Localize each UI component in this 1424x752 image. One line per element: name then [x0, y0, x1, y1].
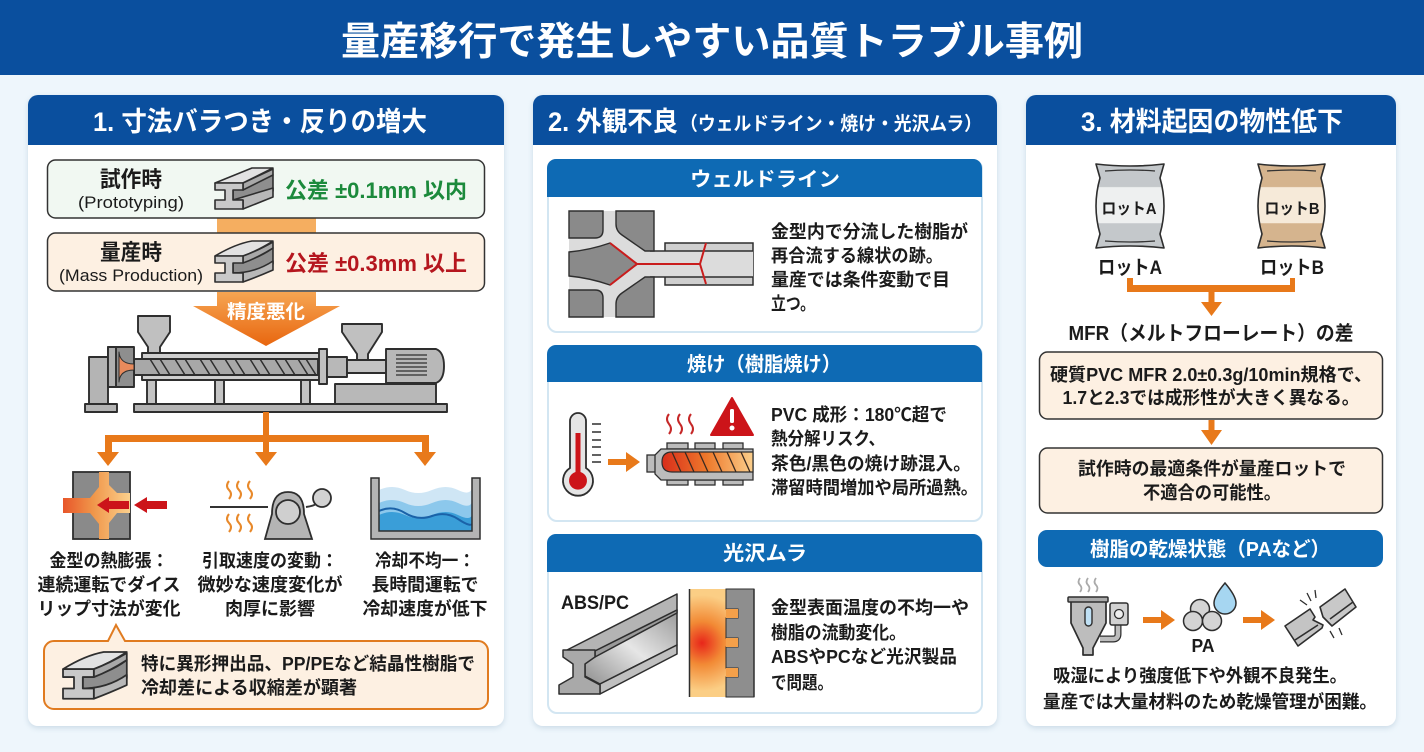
arrow: heat to barrel: [608, 452, 640, 472]
panel 2 heading: （ウェルドライン・焼け・光沢ムラ）: [680, 113, 982, 135]
card heading: [547, 159, 982, 197]
text: moisture absorption: [1043, 666, 1377, 712]
box: lot mismatch: 不適合の可能性。: [1143, 483, 1281, 503]
icon: bag lot A: [1096, 164, 1164, 248]
row: mass production: 公差 ±0.3mm 以上: [285, 251, 467, 276]
text: uneven cooling: 冷却不均一：: [375, 551, 475, 571]
heading: MFR difference: MFR（メルトフローレート）の差: [1068, 322, 1354, 345]
text: pulling speed variation: 肉厚に影響: [225, 598, 315, 619]
callout: crystalline resin shrinkage: 冷却差による収縮差が顕著: [141, 677, 357, 698]
text: pulling speed variation: [198, 551, 342, 619]
card: weld line: [547, 159, 982, 332]
icon: thermometer: [563, 413, 601, 496]
arrow: lots converge: [1127, 278, 1295, 316]
icon: extruder machine: [85, 316, 447, 412]
panel 1 heading: 1. 寸法バラつき・反りの増大: [93, 107, 427, 137]
icon: warning triangle: [711, 398, 753, 435]
text: burn marks: [771, 404, 978, 498]
text: gloss unevenness: ABSやPCなど光沢製品: [771, 647, 957, 667]
text: weld line: 量産では条件変動で目: [771, 270, 950, 290]
text: weld line: [771, 221, 968, 314]
row: mass production: (Mass Production): [59, 266, 203, 285]
arrows: branch to three causes: [97, 412, 436, 466]
icon: beam: [63, 652, 127, 699]
subheading: drying condition: [1038, 530, 1383, 567]
box: MFR specification: 硬質PVC MFR 2.0±0.3g/10min規格で、: [1050, 365, 1372, 385]
text: die thermal expansion: 金型の熱膨張：: [50, 551, 168, 571]
text: die thermal expansion: リップ寸法が変化: [38, 598, 180, 619]
text: die thermal expansion: [38, 551, 180, 619]
text: moisture absorption: 吸湿により強度低下や外観不良発生。: [1053, 666, 1347, 686]
panel 3: material-related property decline: [1026, 95, 1396, 726]
row: prototyping: [48, 160, 484, 218]
icon: bag lot A: ロットA: [1102, 201, 1157, 218]
subheading: drying condition: 樹脂の乾燥状態（PAなど）: [1090, 538, 1330, 561]
box: lot mismatch: 試作時の最適条件が量産ロットで: [1078, 458, 1346, 479]
text: weld line: 立つ。: [771, 294, 815, 314]
text: uneven cooling: 長時間運転で: [372, 575, 478, 595]
row: prototyping: (Prototyping): [78, 193, 184, 212]
title banner: 量産移行で発生しやすい品質トラブル事例: [341, 20, 1083, 64]
card: gloss unevenness: [547, 534, 982, 713]
text: gloss unevenness: 金型表面温度の不均一や: [771, 598, 969, 618]
icon: straight beam: [215, 168, 273, 209]
panel 3 heading: 3. 材料起因の物性低下: [1081, 107, 1343, 137]
icon: warped beam: [215, 241, 273, 282]
icon: overheated barrel: [647, 414, 753, 485]
row: prototyping: 試作時: [100, 167, 162, 192]
card heading: 焼け（樹脂焼け）: [687, 353, 841, 376]
arrow: dryer to pellets: [1143, 610, 1175, 630]
label: ABS/PC: ABS/PC: [561, 593, 629, 614]
box: MFR specification: [1040, 352, 1382, 419]
card heading: 光沢ムラ: [723, 542, 807, 565]
callout: crystalline resin shrinkage: 特に異形押出品、PP/PEなど結晶性樹脂で: [141, 654, 475, 674]
panel 2: appearance defects: [533, 95, 997, 726]
title banner: [0, 0, 1424, 75]
text: burn marks: 茶色/黒色の焼け跡混入。: [771, 453, 971, 474]
row: prototyping: 公差 ±0.1mm 以内: [285, 178, 467, 203]
label: lot A: ロットA: [1098, 257, 1162, 279]
icon: PA pellets and water drop: [1184, 583, 1236, 656]
panel 2 heading: [533, 95, 997, 145]
icon: glossy beam: [559, 594, 677, 694]
arrow: accuracy worsening: 精度悪化: [227, 301, 305, 323]
text: pulling speed variation: 微妙な速度変化が: [198, 574, 342, 595]
text: burn marks: 滞留時間増加や局所過熱。: [771, 477, 978, 498]
card heading: [547, 345, 982, 382]
text: uneven cooling: [362, 551, 488, 619]
card heading: [547, 534, 982, 572]
card: burn marks: [547, 345, 982, 521]
text: gloss unevenness: で問題。: [771, 673, 833, 693]
text: weld line: 再合流する線状の跡。: [771, 246, 943, 266]
card heading: ウェルドライン: [690, 168, 840, 191]
arrow: pellets to fracture: [1243, 610, 1275, 630]
row: mass production: 量産時: [100, 240, 162, 265]
panel 1 heading: [28, 95, 504, 145]
text: gloss unevenness: 樹脂の流動変化。: [771, 623, 906, 643]
diagram: weld line: [569, 211, 753, 317]
icon: hopper dryer: [1068, 578, 1128, 655]
diagram: mold surface temperature: [690, 589, 754, 697]
icon: PA pellets and water drop: PA: [1192, 636, 1214, 656]
box: lot mismatch: [1040, 448, 1382, 513]
icon: bag lot B: [1258, 164, 1325, 248]
icon: fractured part: [1285, 589, 1356, 646]
box: MFR specification: 1.7と2.3では成形性が大きく異なる。: [1062, 387, 1360, 408]
panel 2 heading: 2. 外観不良: [548, 107, 678, 137]
row: mass production: [48, 233, 484, 291]
text: burn marks: PVC 成形：180℃超で: [771, 404, 947, 425]
text: pulling speed variation: 引取速度の変動：: [202, 551, 338, 571]
panel 3 heading: [1026, 95, 1396, 145]
text: die thermal expansion: 連続運転でダイス: [38, 574, 180, 595]
label: lot B: ロットB: [1260, 257, 1324, 279]
icon: pulling speed variation: [210, 481, 331, 539]
panel 1: dimensional variation and warpage: [28, 95, 504, 726]
icon: die thermal expansion: [63, 472, 167, 539]
text: weld line: 金型内で分流した樹脂が: [771, 221, 968, 242]
arrow: accuracy worsening: [193, 292, 340, 346]
text: uneven cooling: 冷却速度が低下: [362, 598, 488, 619]
text: gloss unevenness: [771, 598, 969, 693]
text: burn marks: 熱分解リスク、: [771, 429, 885, 449]
icon: cooling tank: [371, 478, 480, 539]
icon: bag lot B: ロットB: [1264, 201, 1320, 218]
text: moisture absorption: 量産では大量材料のため乾燥管理が困難。: [1043, 691, 1377, 712]
arrow: spec to conclusion: [1201, 420, 1222, 445]
connector between rows: [217, 217, 316, 234]
callout: crystalline resin shrinkage: [44, 625, 488, 709]
